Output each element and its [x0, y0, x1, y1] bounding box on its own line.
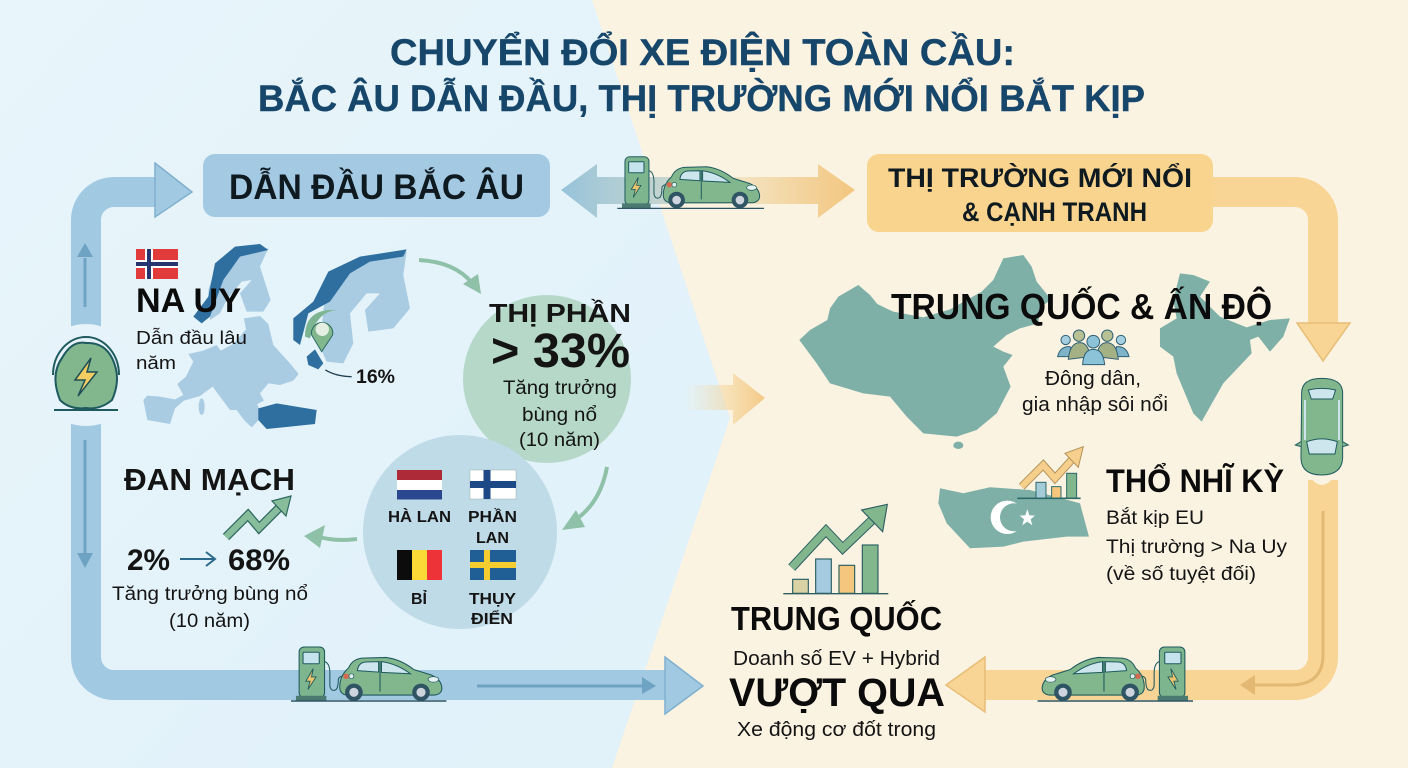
two-way arrow between headers — [561, 164, 855, 218]
country labels — [388, 507, 517, 628]
flag: Finland — [470, 470, 516, 499]
panel: Denmark: (10 năm) — [169, 611, 250, 632]
panel: Denmark: 2% — [127, 544, 170, 577]
text: Norway: Dẫn đầu lâu — [136, 327, 247, 348]
text: dense population — [1022, 368, 1168, 416]
panel text: China — [729, 599, 945, 741]
flag: Belgium — [397, 550, 442, 580]
header: emerging markets: & CẠNH TRANH — [962, 197, 1147, 227]
panel text: Turkey: (về số tuyệt đối) — [1106, 564, 1256, 585]
panel: market share circle — [463, 295, 631, 463]
panel text: China: TRUNG QUỐC — [731, 599, 942, 637]
header: emerging markets: THỊ TRƯỜNG MỚI NỔI — [888, 162, 1192, 193]
panel: Denmark — [112, 462, 308, 632]
arrow: countries to Denmark — [304, 525, 357, 548]
panel: Denmark: 68% — [228, 544, 290, 577]
panel text: China: VƯỢT QUA — [729, 671, 945, 715]
center transition arrow — [685, 373, 765, 425]
text: Norway — [136, 282, 247, 373]
blue flow loop arrow — [77, 163, 703, 714]
panel text: Turkey: THỔ NHĨ KỲ — [1106, 463, 1284, 499]
header: emerging markets — [867, 154, 1213, 232]
title: CHUYỂN ĐỔI XE ĐIỆN TOÀN CẦU: — [390, 30, 1015, 73]
heading: China and India: TRUNG QUỐC & ẤN ĐỘ — [891, 285, 1272, 327]
panel: countries circle — [363, 435, 557, 629]
text: Norway: năm — [136, 353, 176, 373]
panel text: Turkey: Thị trường > Na Uy — [1106, 537, 1288, 558]
country labels: THỤY — [469, 591, 516, 608]
map: China and India — [799, 255, 1290, 449]
panel: market share circle: Tăng trưởng — [503, 378, 617, 399]
text: Norway: NA UY — [136, 282, 241, 320]
icon: EV charging top — [617, 157, 764, 208]
country labels: HÀ LAN — [388, 507, 451, 526]
country labels: ĐIỂN — [471, 609, 513, 628]
panel text: Turkey: Bắt kịp EU — [1106, 507, 1204, 529]
text: dense population: gia nhập sôi nổi — [1022, 394, 1168, 416]
chart: Turkey growth — [1017, 447, 1083, 498]
panel: Denmark: ĐAN MẠCH — [124, 462, 295, 497]
panel text: China: Xe động cơ đốt trong — [737, 719, 936, 741]
icon: Denmark trend arrow — [226, 496, 291, 537]
flag: Sweden — [470, 550, 516, 580]
arrow: 2% to 68% — [180, 552, 215, 566]
arrow: market share to countries — [562, 467, 607, 530]
panel: market share circle: (10 năm) — [519, 430, 600, 451]
flag: Norway — [136, 249, 178, 279]
orange flow loop arrow — [946, 192, 1350, 712]
panel: market share circle: THỊ PHẦN — [489, 298, 631, 328]
country labels: PHẦN — [468, 507, 517, 526]
arrow: Scandinavia to market share — [419, 260, 481, 294]
map: Turkey with crescent — [938, 487, 1089, 548]
icon: top-view car — [1295, 375, 1348, 485]
map: Europe and Scandinavia — [143, 244, 410, 429]
header: Nordic lead — [203, 154, 550, 217]
title: BẮC ÂU DẪN ĐẦU, THỊ TRƯỜNG MỚI NỔI BẮT KỊP — [258, 76, 1145, 119]
panel: Denmark: Tăng trưởng bùng nổ — [112, 584, 308, 605]
header: Nordic lead: DẪN ĐẦU BẮC ÂU — [229, 167, 524, 207]
label: 16%: 16% — [356, 367, 395, 388]
title — [258, 30, 1145, 119]
panel text: Turkey — [1106, 463, 1288, 585]
panel: market share circle: > 33% — [491, 325, 630, 378]
flag: Netherlands — [397, 470, 442, 500]
icon: charging badge — [35, 324, 137, 426]
panel text: China: Doanh số EV + Hybrid — [733, 648, 940, 670]
text: dense population: Đông dân, — [1045, 368, 1141, 390]
country labels: BỈ — [411, 589, 428, 608]
icon: people — [1058, 330, 1129, 365]
panel: China chart — [783, 504, 888, 594]
icon: EV charging bottom right — [1038, 647, 1193, 701]
country labels: LAN — [476, 530, 509, 547]
panel: market share circle: bùng nổ — [522, 405, 597, 426]
icon: EV charging bottom left — [291, 647, 446, 701]
